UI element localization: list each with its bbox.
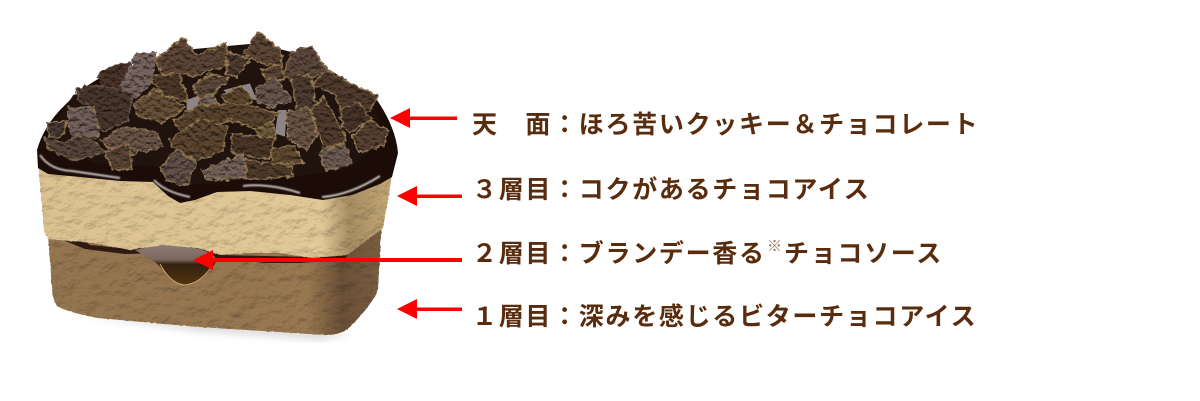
- top coating: chocolate glaze: [37, 50, 398, 203]
- label: second layer: チョコソース: [784, 240, 943, 268]
- arrow: second layer: [193, 250, 462, 270]
- dark gaps between crumbs: [50, 43, 383, 187]
- layer 2: brandy chocolate sauce: [58, 238, 347, 285]
- bottom shadow: [60, 312, 350, 340]
- label: top surface: 天 面：ほろ苦いクッキー＆チョコレート: [472, 111, 979, 139]
- arrow: first layer: [397, 299, 462, 319]
- arrow: top layer: [390, 108, 457, 128]
- label: second layer: ２層目：ブランデー香る: [472, 240, 766, 268]
- arrow: third layer: [397, 186, 462, 206]
- topping: bitter cookie and chocolate crumbs: [44, 32, 388, 187]
- chocolate sheen: [187, 83, 287, 137]
- layer 3: chocolate ice cream: [38, 165, 392, 258]
- label: first layer: １層目：深みを感じるビターチョコアイス: [472, 303, 977, 331]
- label: third layer: ３層目：コクがあるチョコアイス: [472, 175, 871, 204]
- label: second layer: ※: [767, 238, 782, 255]
- product illustration: layered chocolate ice cream: [37, 32, 398, 340]
- layer 1: bitter chocolate ice cream: [48, 222, 382, 335]
